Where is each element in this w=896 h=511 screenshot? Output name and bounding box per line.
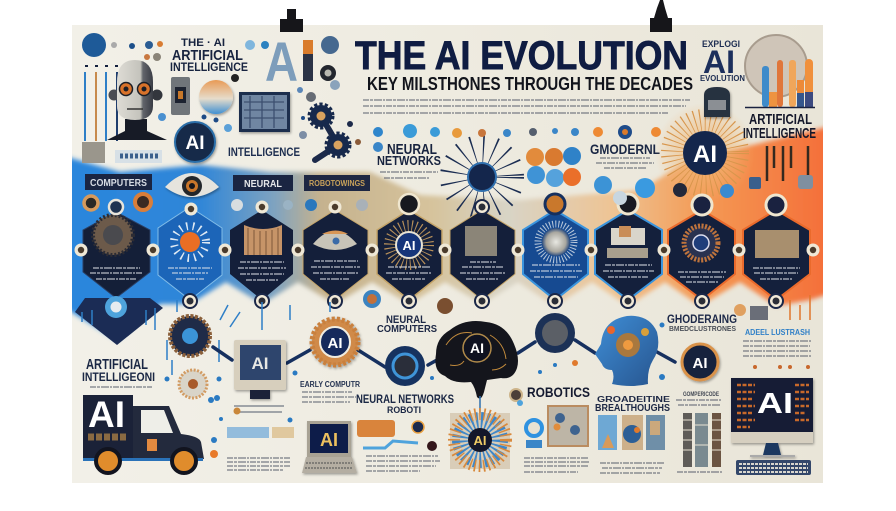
neural computers heading: COMPUTERS	[377, 324, 437, 335]
starburst AI panel	[450, 413, 510, 469]
panel: explore AI evolution	[700, 39, 745, 117]
AI badge: AI	[186, 133, 204, 154]
connector block	[82, 142, 105, 163]
tail	[75, 298, 163, 345]
heading: groundbreaking	[667, 312, 737, 333]
panel: robot and early AI illustration cluster	[82, 30, 361, 163]
monitor with AI: AI	[252, 354, 268, 373]
truck box	[83, 395, 133, 459]
icon: globe badge	[82, 33, 106, 57]
curtain icon	[244, 225, 282, 255]
panel: milestone hexagon 4	[303, 210, 368, 300]
caption above bars	[676, 392, 722, 405]
text lines	[380, 172, 438, 178]
AI on truck: AI	[88, 394, 125, 435]
orange rays	[454, 414, 506, 466]
small icons	[373, 124, 440, 152]
heading: robotics: ROBOTICS	[527, 384, 590, 400]
panel: milestone hexagon 1	[75, 200, 163, 345]
AI ring badge: AI	[692, 355, 708, 372]
caption: early computer: EARLY COMPUTR	[300, 380, 360, 389]
icon: laptop: AI	[320, 430, 338, 450]
globe icon	[199, 80, 233, 114]
body text	[366, 456, 440, 471]
picture text	[600, 463, 664, 473]
panel: milestone hexagon 8	[595, 210, 662, 300]
caption: early computer	[300, 380, 360, 402]
building image	[465, 226, 497, 256]
building image	[607, 226, 648, 258]
wiring: small vertical lines	[82, 300, 330, 375]
ring icons	[84, 194, 368, 211]
eye icon	[313, 230, 357, 250]
panel: milestone hexagon 5	[377, 210, 442, 300]
rays	[672, 120, 738, 186]
body text	[90, 268, 142, 279]
icon: eye	[165, 173, 219, 197]
heading: model illustrations: ADEEL LUSTRASH	[745, 328, 810, 337]
heading: groundbreaking breakthroughs	[595, 395, 671, 414]
robotics image	[547, 405, 589, 447]
heading: artificial intelligence right: INTELLIGENCE	[743, 125, 816, 142]
heading: the AI artificial intelligence: ARTIFICIAL	[172, 47, 243, 64]
icon: brain with AI: AI	[470, 340, 484, 356]
desktop monitor with AI: AI	[757, 388, 793, 420]
text	[700, 39, 745, 83]
right upper ornaments	[734, 295, 810, 369]
neural computers heading	[377, 314, 437, 335]
device	[704, 87, 730, 117]
heading: neural networks robot: ROBOTI	[387, 405, 421, 415]
labels row: computers: COMPUTERS	[90, 178, 147, 189]
top node	[109, 200, 123, 214]
gears	[306, 92, 349, 160]
heading: artificial intelligence bottom-left: ARTIFICIAL	[86, 356, 148, 373]
sun	[180, 232, 200, 252]
burst	[538, 224, 574, 260]
intro text block	[363, 100, 690, 113]
connector from brain to burst	[479, 396, 481, 414]
heading: groundbreaking breakthroughs: BREALTHOUGHS	[595, 403, 670, 414]
panel: milestone hexagon 3	[230, 210, 293, 300]
circular robotics node	[535, 313, 575, 353]
heading: groundbreaking breakthroughs: GROADEITINE	[597, 395, 671, 404]
heading: neural networks robot	[356, 392, 454, 415]
poster background	[60, 25, 835, 483]
subtitle: KEY MILSTHONES THROUGH THE DECADES	[367, 73, 693, 94]
swirl	[684, 226, 718, 260]
label: neural: NEURAL	[244, 179, 282, 190]
heading: artificial intelligence bottom-left	[82, 356, 155, 384]
heading: groundbreaking: GHODERAING	[667, 312, 737, 326]
heading: groundbreaking: BMEDCLUSTRONES	[669, 326, 736, 333]
panel: milestone hexagon 2	[158, 207, 222, 300]
glow	[655, 103, 755, 203]
large letters AI: A	[265, 30, 298, 93]
hexagon	[83, 212, 150, 298]
icon: brain with AI	[435, 321, 518, 399]
sphere node	[385, 346, 425, 386]
icon: laptop	[302, 421, 357, 473]
small caption	[90, 386, 152, 388]
parts cluster: left centre	[208, 397, 294, 458]
code columns	[737, 385, 809, 427]
heading: neural networks robot: NEURAL NETWORKS	[356, 392, 454, 406]
stripe	[83, 458, 203, 461]
scattered dots lower area	[164, 322, 665, 422]
label: robot workings: ROBOTOWINGS	[309, 179, 366, 188]
AI ring badge	[682, 344, 718, 380]
panel: AI sun	[655, 103, 755, 203]
top icons	[452, 128, 511, 138]
panel: bar chart with fingerprint disc	[745, 35, 815, 108]
circuit board	[239, 92, 290, 132]
neural computers heading: NEURAL	[386, 314, 426, 326]
rays	[462, 422, 498, 458]
burst	[390, 226, 428, 264]
icon: human head profile	[595, 316, 658, 386]
caption above bars: GOMPERICODE	[683, 392, 719, 398]
heading: model illustrations	[743, 328, 812, 356]
robotics body text	[524, 458, 590, 472]
AI disc: AI	[402, 238, 416, 253]
window	[141, 410, 173, 433]
binder clip right	[650, 0, 672, 32]
icon: truck with AI	[83, 394, 204, 473]
body text under parts	[227, 458, 290, 470]
panel: modern heading: GMODERNL	[590, 141, 660, 157]
text: EXPLOGI	[702, 39, 740, 49]
AI disc: AI	[693, 141, 717, 168]
text: EVOLUTION	[700, 74, 745, 83]
sun rays	[174, 226, 206, 258]
scattered small icons	[111, 36, 361, 145]
panel: neural burst icons	[452, 128, 511, 205]
panel: milestone hexagon 6	[450, 210, 515, 300]
rays	[454, 149, 510, 205]
heading: the AI artificial intelligence: THE · AI	[181, 37, 225, 49]
heading text	[377, 141, 441, 168]
AI disc: AI	[474, 433, 486, 448]
binder clip left	[280, 9, 303, 32]
timeline connectors	[213, 340, 675, 367]
swirl icon	[93, 215, 133, 255]
signal lines	[85, 66, 122, 141]
device icon	[171, 77, 190, 115]
label: neural	[233, 175, 293, 191]
cab	[133, 406, 204, 459]
labels row: computers	[85, 174, 152, 190]
hub	[468, 163, 496, 191]
blue button	[105, 296, 127, 318]
panel: neural networks heading	[373, 124, 441, 178]
robot illustration	[107, 60, 167, 140]
panel: milestone hexagon 10	[743, 210, 810, 300]
panel: milestone hexagon 9	[668, 210, 735, 300]
keyboard	[736, 460, 811, 475]
heading: artificial intelligence right	[743, 111, 816, 142]
orange panel	[147, 439, 157, 451]
sphere	[542, 228, 570, 256]
baseline	[745, 106, 815, 108]
panel: milestone hexagon 7	[523, 210, 588, 300]
panel: circle cluster	[526, 128, 581, 187]
heading: the AI artificial intelligence	[170, 37, 248, 74]
milestone node: gear disc	[170, 316, 210, 356]
heading: artificial intelligence bottom-left: INTELLIGEONI	[82, 370, 155, 384]
panel: modern heading	[590, 125, 661, 168]
AI orange gear: AI	[328, 335, 342, 352]
wheels	[96, 449, 196, 473]
robot parts	[357, 420, 437, 451]
heading: artificial intelligence right: ARTIFICIAL	[749, 111, 812, 128]
bar columns	[677, 413, 722, 472]
robotics ring icon	[510, 389, 542, 448]
connector nodes	[74, 176, 820, 314]
desktop monitor with AI	[731, 378, 813, 457]
building image	[755, 230, 799, 258]
dash	[88, 434, 128, 440]
small module	[115, 150, 162, 163]
text: AI	[703, 44, 735, 80]
panel: lab machines right	[749, 146, 813, 189]
label: intelligence: INTELLIGENCE	[228, 145, 300, 159]
fingerprint disc	[745, 35, 807, 97]
small gear	[179, 370, 207, 398]
label: robot workings	[304, 175, 370, 191]
heading text: NETWORKS	[377, 153, 441, 168]
AI orange gear	[312, 319, 358, 365]
AI badge	[175, 122, 215, 162]
heading text: NEURAL	[387, 141, 437, 158]
title: THE AI EVOLUTION	[355, 34, 688, 78]
monitor with AI	[234, 340, 286, 399]
heading: the AI artificial intelligence: INTELLIGENCE	[170, 60, 248, 74]
bars	[762, 59, 813, 107]
picture strip	[598, 415, 665, 450]
